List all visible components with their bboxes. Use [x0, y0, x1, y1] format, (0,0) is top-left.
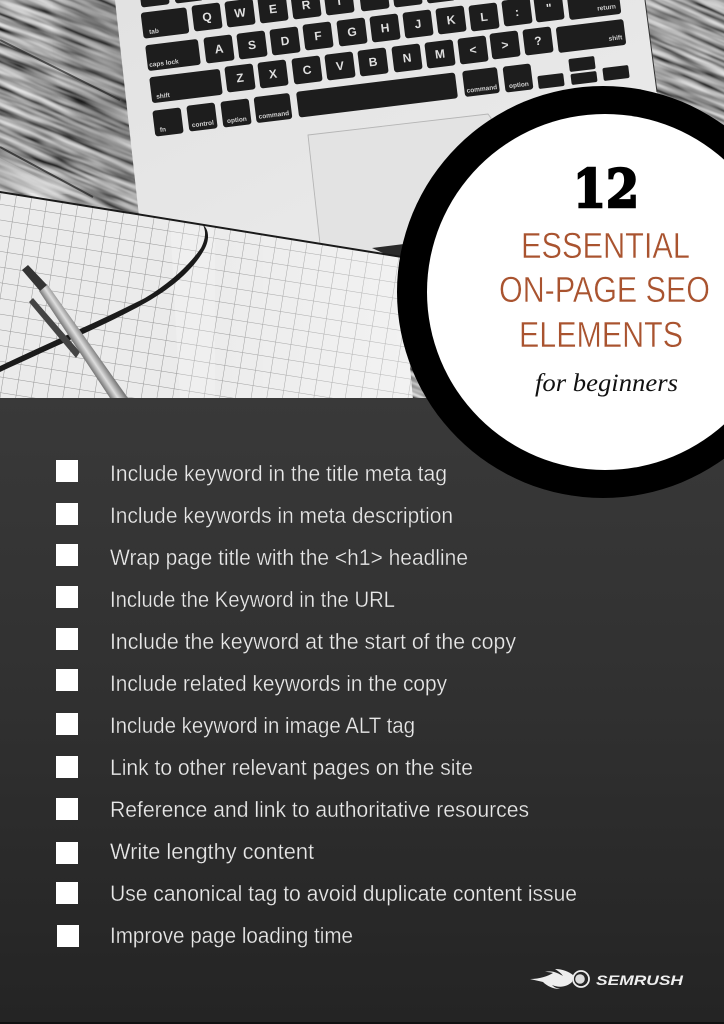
keyboard keys: caps lock [149, 58, 179, 69]
keyboard keys: A [214, 41, 224, 56]
keyboard keys: G [347, 24, 357, 40]
trackpad [308, 114, 510, 262]
item 6: Include related keywords in the copy [110, 671, 447, 696]
keyboard keys: V [335, 59, 345, 73]
keyboard keys: M [434, 46, 446, 62]
laptop base shadow [372, 243, 412, 262]
item 9: Reference and link to authoritative resources [110, 797, 529, 822]
bottom edge strip [0, 1022, 724, 1024]
item 11: Use canonical tag to avoid duplicate content issue [110, 881, 577, 906]
keyboard keys: shift [608, 34, 624, 43]
item 3: Wrap page title with the <h1> headline [110, 545, 468, 570]
icon: flaming ball [530, 969, 589, 989]
keyboard keys: > [501, 38, 509, 52]
keyboard keys: command [258, 110, 290, 121]
keyboard keys: B [368, 54, 378, 69]
item 2: Include keywords in meta description [110, 503, 453, 528]
keyboard keys: Q [202, 9, 212, 25]
keyboard keys: E [268, 2, 278, 16]
title line: elements: ELEMENTS [519, 314, 683, 355]
semrush logo [530, 969, 684, 989]
logo wordmark: SEMRUSH [596, 972, 684, 988]
keyboard keys [138, 0, 630, 137]
item 1: Include keyword in the title meta tag [110, 461, 447, 486]
laptop body [115, 0, 672, 270]
keyboard keys: command [466, 84, 498, 95]
keyboard keys: option [227, 116, 247, 125]
title badge circle [397, 86, 724, 498]
item 5: Include the keyword at the start of the copy [110, 629, 516, 654]
keyboard keys: W [234, 5, 247, 21]
item 10: Write lengthy content [110, 839, 314, 864]
keyboard keys: L [480, 10, 488, 24]
keyboard keys: return [597, 3, 616, 13]
item 8: Link to other relevant pages on the site [110, 755, 473, 780]
keyboard keys: Z [236, 71, 244, 85]
checklist [56, 460, 577, 948]
keyboard keys: C [302, 62, 312, 77]
item 12: Improve page loading time [110, 923, 353, 948]
notebook [0, 191, 413, 400]
keyboard keys: K [446, 12, 456, 27]
keyboard keys: N [402, 51, 412, 65]
keyboard keys: : [514, 5, 520, 19]
keyboard keys: shift [156, 92, 171, 101]
keyboard keys: tab [149, 28, 159, 36]
keyboard keys: F [314, 29, 322, 43]
keyboard keys: D [280, 33, 290, 48]
keyboard keys: X [268, 67, 278, 81]
item 4: Include the Keyword in the URL [110, 587, 395, 612]
keyboard keys: S [247, 38, 257, 52]
keyboard keys: fn [159, 126, 166, 134]
keyboard keys: ? [534, 34, 542, 48]
keyboard keys: " [545, 1, 553, 15]
ribbon bookmark [0, 225, 208, 372]
dark checklist panel [0, 398, 724, 1024]
item 7: Include keyword in image ALT tag [110, 713, 415, 738]
number 12: 12 [573, 159, 639, 220]
keyboard keys: < [469, 43, 477, 57]
keyboard keys: control [192, 120, 214, 129]
keyboard keys: option [509, 81, 529, 90]
subtitle: for beginners [535, 370, 678, 397]
keyboard keys: J [414, 17, 422, 31]
keyboard keys: H [380, 21, 390, 35]
title line: essential: ESSENTIAL [521, 225, 690, 266]
pen [22, 265, 128, 398]
